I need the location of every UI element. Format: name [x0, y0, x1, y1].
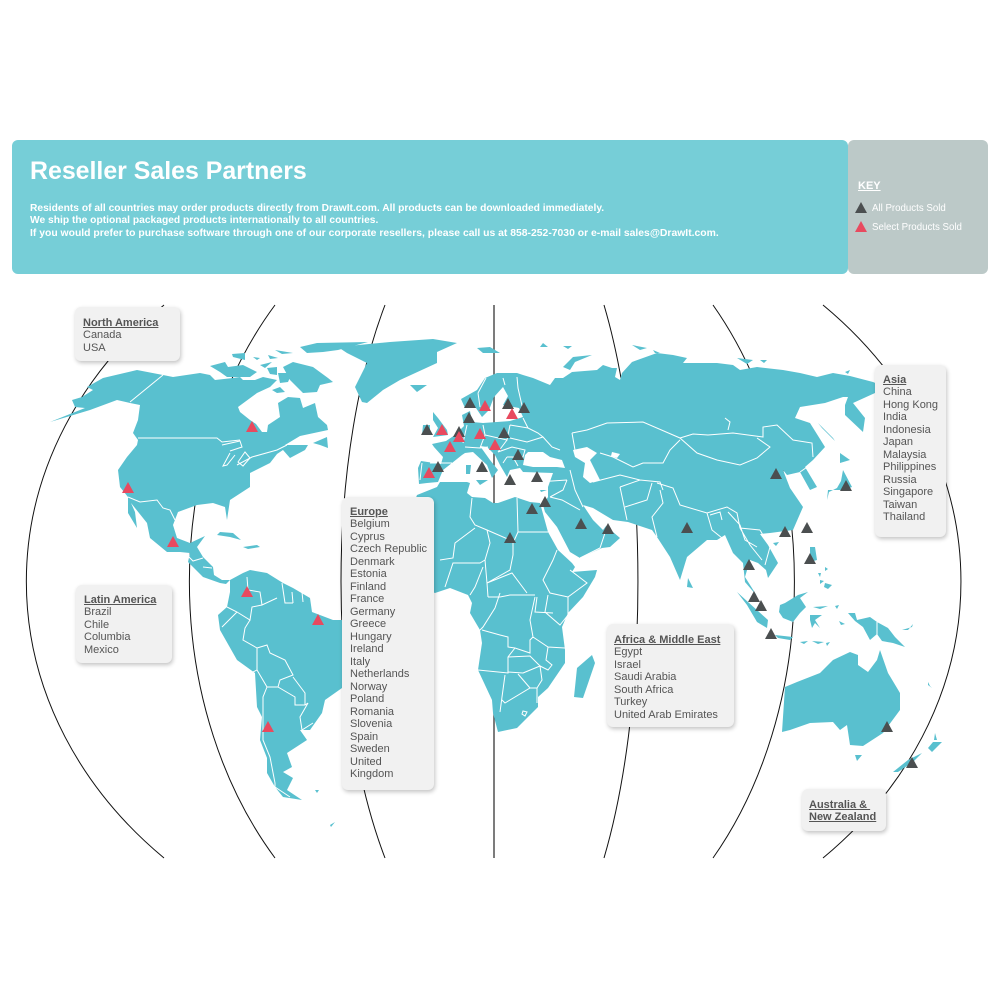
- globe grid lines: [26, 305, 961, 858]
- callout: Europe: Belgium: [350, 518, 390, 530]
- Canadian Arctic islands: [210, 342, 368, 393]
- Madagascar: [574, 655, 595, 698]
- callout: Europe: Denmark: [350, 556, 395, 568]
- Mediterranean islands: [466, 465, 547, 492]
- intro text: If you would prefer to purchase software through one of our corporate resellers, please call us at 858-252-7030 or e-mail sales@DrawIt.com.: [30, 228, 719, 238]
- callout: Africa and Middle East: Africa & Middle East: [614, 634, 720, 646]
- Eurasia: [418, 353, 880, 596]
- callout: Africa and Middle East: United Arab Emirates: [614, 708, 718, 720]
- key panel: [848, 140, 988, 274]
- callout: Europe: Germany: [350, 606, 395, 618]
- callout: Asia: [875, 365, 946, 537]
- callout: Europe: Poland: [350, 693, 384, 705]
- callout: Europe: United: [350, 756, 382, 768]
- Newfoundland: [313, 437, 328, 448]
- Indonesia and New Guinea: [737, 592, 913, 647]
- world map: [50, 339, 942, 827]
- callout: Asia: Japan: [883, 436, 913, 448]
- icon: all products triangle: [855, 202, 867, 213]
- callout: Asia: India: [883, 411, 907, 423]
- Greenland: [338, 339, 457, 403]
- callout: Europe: Europe: [350, 506, 388, 518]
- markers: select products sold: [122, 400, 518, 732]
- country borders and lake outlines: [128, 375, 877, 797]
- callout: Europe: Norway: [350, 680, 387, 692]
- callout: Europe: Czech Republic: [350, 543, 427, 555]
- Australia: [782, 650, 900, 746]
- callout: Africa and Middle East: South Africa: [614, 684, 673, 696]
- key label: select products: Select Products Sold: [872, 222, 962, 233]
- callout: Asia: Hong Kong: [883, 398, 938, 410]
- callout: Africa and Middle East: [607, 624, 734, 727]
- callout: Europe: Romania: [350, 706, 394, 718]
- callout: Australia and New Zealand: Australia &: [809, 798, 867, 810]
- callout: Latin America: Latin America: [84, 594, 156, 606]
- callout: Europe: Greece: [350, 618, 386, 630]
- callout: Europe: France: [350, 593, 384, 605]
- intro text: [30, 202, 719, 238]
- callout: Latin America: Brazil: [84, 606, 112, 618]
- callout: Asia: Asia: [883, 374, 906, 386]
- Philippines: [810, 547, 832, 589]
- callout: Europe: Estonia: [350, 568, 387, 580]
- callout: Asia: Singapore: [883, 486, 933, 498]
- callout: Asia: Philippines: [883, 461, 936, 473]
- callout: Africa and Middle East: Egypt: [614, 646, 642, 658]
- callout: Europe: Italy: [350, 656, 370, 668]
- callout: Latin America: Chile: [84, 618, 109, 630]
- callout: North America: Canada: [83, 329, 122, 341]
- callout: Asia: Malaysia: [883, 448, 926, 460]
- callout: Europe: Slovenia: [350, 718, 392, 730]
- callout: Europe: Kingdom: [350, 768, 393, 780]
- callout: Europe: Spain: [350, 730, 378, 742]
- callout: Latin America: [76, 585, 172, 663]
- Tasmania and New Zealand: [855, 682, 942, 772]
- intro text: We ship the optional packaged products internationally to all countries.: [30, 215, 378, 226]
- key label: all products: All Products Sold: [872, 203, 946, 214]
- North America: [50, 370, 328, 584]
- callout: Europe: Ireland: [350, 643, 384, 655]
- callout: North America: USA: [83, 342, 106, 354]
- callout: Africa and Middle East: Saudi Arabia: [614, 671, 676, 683]
- callout: Australia and New Zealand: New Zealand: [809, 811, 876, 823]
- callout: Asia: Thailand: [883, 511, 925, 523]
- key heading: KEY: [858, 180, 881, 192]
- callout: Europe: Sweden: [350, 743, 390, 755]
- intro text: Residents of all countries may order products directly from DrawIt.com. All products can be downloaded immediately.: [30, 202, 604, 214]
- white seas: [523, 447, 620, 483]
- callout: Asia: China: [883, 386, 912, 398]
- header panel: [12, 140, 848, 274]
- South Atlantic islands: [315, 790, 335, 827]
- callout: Europe: [342, 497, 434, 790]
- markers: all products sold: [421, 397, 918, 768]
- callout: Latin America: Mexico: [84, 644, 119, 656]
- callout: Latin America: Columbia: [84, 631, 130, 643]
- callout: Asia: Taiwan: [883, 498, 917, 510]
- Hainan and Sri Lanka: [687, 542, 779, 588]
- title: Reseller Sales Partners: [30, 157, 307, 185]
- callout: Europe: Finland: [350, 580, 386, 592]
- Arctic and North Atlantic islands: [410, 343, 850, 392]
- South America: [218, 570, 368, 800]
- callout: Europe: Cyprus: [350, 530, 385, 542]
- callout: Africa and Middle East: Turkey: [614, 696, 647, 708]
- callout: Africa and Middle East: Israel: [614, 658, 641, 670]
- Africa: [400, 482, 597, 732]
- callout: Europe: Netherlands: [350, 668, 409, 680]
- callout: North America: [75, 307, 180, 361]
- Japan and Sakhalin: [818, 423, 852, 500]
- icon: select products triangle: [855, 221, 867, 232]
- callout: North America: North America: [83, 316, 158, 328]
- callout: Australia and New Zealand: [802, 789, 886, 831]
- callout: Europe: Hungary: [350, 630, 392, 642]
- callout: Asia: Russia: [883, 474, 917, 486]
- callout: Asia: Indonesia: [883, 424, 931, 436]
- Caribbean islands: [217, 532, 260, 549]
- British Isles: [422, 412, 448, 437]
